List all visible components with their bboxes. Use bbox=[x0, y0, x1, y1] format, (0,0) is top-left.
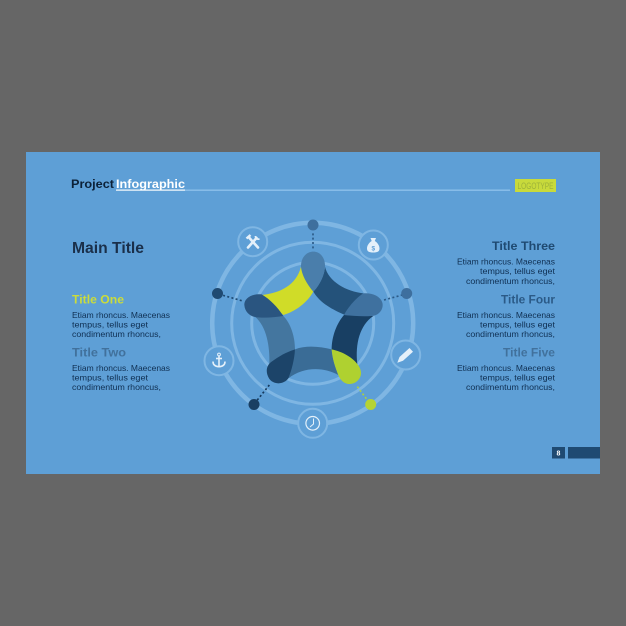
text block: title two bbox=[72, 346, 170, 392]
text block: title four: Title Four bbox=[501, 292, 555, 306]
text block: title three: condimentum rhoncus, bbox=[466, 276, 555, 286]
marker: bottom-right lime dot bbox=[365, 399, 376, 410]
band: bottom bbox=[288, 347, 338, 378]
icon: clock bbox=[298, 409, 327, 438]
logotype badge bbox=[515, 179, 556, 192]
marker: bottom-left dot bbox=[248, 399, 260, 410]
text block: title two: tempus, tellus eget bbox=[72, 372, 149, 382]
text block: title five: Etiam rhoncus. Maecenas bbox=[457, 363, 555, 373]
main title: Main Title bbox=[72, 240, 144, 257]
lobe: right bbox=[344, 293, 383, 316]
marker: right dot bbox=[401, 288, 412, 299]
logotype badge: LOGOTYPE bbox=[518, 181, 554, 191]
panel: blue slide background bbox=[26, 152, 600, 474]
icon: anchor bbox=[204, 346, 234, 375]
text block: title five: condimentum rhoncus, bbox=[466, 382, 555, 392]
page number bbox=[552, 447, 600, 458]
lobe: lime bottom right bbox=[332, 349, 361, 384]
lobe: bottom left bbox=[267, 349, 295, 383]
text block: title five: Title Five bbox=[503, 346, 555, 360]
header: project title: Project bbox=[71, 177, 114, 191]
lobe: top bbox=[301, 252, 325, 292]
connectors bbox=[221, 233, 403, 403]
text block: title one: condimentum rhoncus, bbox=[72, 329, 161, 339]
page number: 8 bbox=[557, 450, 561, 458]
header: project title: Infographic bbox=[116, 177, 185, 191]
text block: title one: tempus, tellus eget bbox=[72, 320, 149, 330]
text block: title two: Etiam rhoncus. Maecenas bbox=[72, 363, 170, 373]
text block: title four: tempus, tellus eget bbox=[480, 320, 556, 330]
text block: title three bbox=[457, 239, 556, 286]
text block: title five bbox=[457, 346, 556, 392]
marker: left dot bbox=[212, 288, 223, 299]
header: project title bbox=[71, 177, 185, 191]
icon: money bag bbox=[359, 230, 388, 260]
text block: title one: Etiam rhoncus. Maecenas bbox=[72, 310, 170, 320]
marker: top dot bbox=[308, 220, 318, 230]
text block: title two: Title Two bbox=[72, 346, 126, 360]
text block: title two: condimentum rhoncus, bbox=[72, 382, 161, 392]
text block: title four bbox=[457, 292, 556, 339]
chart: five-point star and connectors bbox=[221, 233, 403, 403]
text block: title three: tempus, tellus eget bbox=[480, 266, 556, 276]
text block: title three: Title Three bbox=[492, 239, 555, 253]
chart: concentric rings bbox=[212, 223, 413, 424]
band: top-right bbox=[313, 267, 363, 315]
text block: title one bbox=[72, 292, 170, 339]
band: right bbox=[332, 315, 373, 364]
icon: tools bbox=[238, 227, 267, 256]
text block: title five: tempus, tellus eget bbox=[480, 372, 556, 382]
band: left bbox=[255, 316, 295, 364]
text block: title four: condimentum rhoncus, bbox=[466, 329, 555, 339]
icon: pencil bbox=[391, 340, 420, 370]
text block: title one: Title One bbox=[72, 292, 124, 306]
text block: title four: Etiam rhoncus. Maecenas bbox=[457, 310, 555, 320]
icon: money bag: $ bbox=[371, 246, 375, 252]
text block: title three: Etiam rhoncus. Maecenas bbox=[457, 256, 555, 266]
lobe: left bbox=[244, 294, 283, 318]
band: lime top-left bbox=[262, 267, 313, 315]
